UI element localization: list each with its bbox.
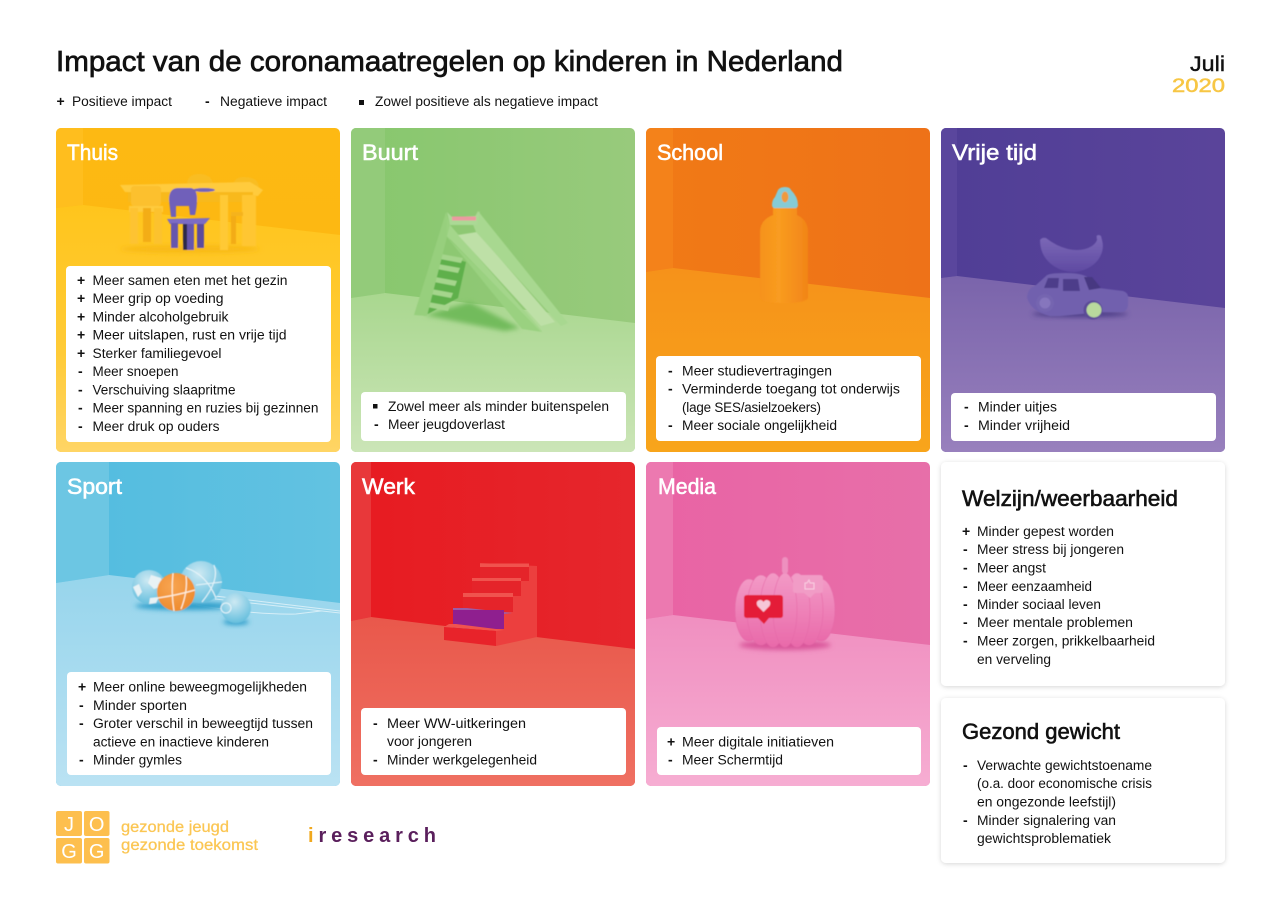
list: Gezond gewicht: (o.a. door economische crisis — [977, 776, 1152, 791]
text box: Thuis: + — [77, 345, 85, 361]
list: Welzijn: Meer stress bij jongeren — [977, 542, 1124, 557]
text box: Thuis: + — [77, 327, 85, 343]
text box: Thuis: Meer grip op voeding — [92, 291, 224, 306]
panel: Thuis — [56, 128, 340, 452]
list: Gezond gewicht: Verwachte gewichtstoename — [977, 758, 1152, 773]
panel: Sport — [56, 462, 340, 786]
heading: Thuis: Thuis — [67, 140, 118, 165]
text box: Buurt — [361, 392, 626, 441]
text box: Buurt: Zowel meer als minder buitenspelen — [388, 399, 609, 414]
text box: Vrije tijd: - — [964, 398, 969, 414]
heading: Gezond gewicht: Gezond gewicht — [962, 719, 1120, 744]
text box: Thuis: Verschuiving slaapritme — [92, 382, 236, 398]
text box: Sport: - — [79, 752, 84, 768]
text box: Buurt: - — [374, 416, 379, 432]
list: Welzijn: - — [963, 578, 968, 594]
panel: Gezond gewicht — [941, 698, 1225, 863]
text box: School: - — [668, 362, 673, 378]
text box: Thuis: Meer uitslapen, rust en vrije tijd — [92, 328, 286, 343]
text box: Media — [657, 727, 921, 775]
list: Gezond gewicht: Minder signalering van — [977, 813, 1116, 828]
icon: pumpkin with like bubbles — [735, 557, 835, 650]
title: Impact van de coronamaatregelen op kinderen in Nederland — [56, 46, 843, 78]
legend: - — [205, 93, 210, 109]
icon: table and chairs — [120, 174, 263, 253]
text box: Werk — [361, 708, 626, 775]
list: Welzijn: - — [963, 541, 968, 557]
logo: JOGG: G — [89, 841, 104, 863]
legend — [56, 93, 598, 109]
legend: Zowel positieve als negatieve impact — [375, 94, 598, 109]
text box: School — [656, 356, 921, 441]
text box: Thuis: + — [77, 308, 85, 324]
icon: toy car with banana — [1027, 235, 1128, 320]
text box: Vrije tijd: - — [964, 417, 969, 433]
text box: Thuis: Meer snoepen — [92, 364, 178, 379]
logo: JOGG: gezonde jeugd — [121, 819, 229, 836]
panel: Welzijn/weerbaarheid — [941, 462, 1225, 686]
text box: Thuis: Minder alcoholgebruik — [92, 310, 229, 324]
text box: Vrije tijd: Minder vrijheid — [978, 418, 1070, 433]
list: Welzijn: - — [963, 596, 968, 612]
list: Gezond gewicht — [963, 757, 1152, 846]
list: Welzijn: Meer mentale problemen — [977, 615, 1133, 630]
text box: Sport: + — [78, 679, 86, 695]
text box: School: - — [668, 417, 673, 433]
text box: Werk: voor jongeren — [387, 734, 472, 749]
text box: Werk: - — [373, 715, 378, 731]
text box: Thuis: + — [77, 272, 85, 288]
heading: School: School — [657, 140, 723, 165]
heading: Welzijn/weerbaarheid: Welzijn/weerbaarheid — [962, 486, 1178, 511]
heading: Vrije tijd: Vrije tijd — [952, 140, 1037, 165]
text box: Media: Meer digitale initiatieven — [682, 734, 834, 750]
text box: Sport: Minder sporten — [93, 698, 187, 713]
list: Welzijn: - — [963, 614, 968, 630]
text box: Sport: Groter verschil in beweegtijd tussen — [93, 716, 313, 731]
text box: Thuis: Meer samen eten met het gezin — [92, 273, 288, 288]
text box: Thuis — [66, 266, 331, 442]
text box: School: Meer sociale ongelijkheid — [682, 418, 837, 433]
list: Welzijn: Meer eenzaamheid — [977, 579, 1092, 594]
text box: Thuis: Meer druk op ouders — [92, 419, 220, 434]
text box: School: (lage SES/asielzoekers) — [682, 400, 821, 415]
text box: Thuis: - — [78, 382, 83, 398]
list: Welzijn — [962, 523, 1155, 667]
list: Gezond gewicht: - — [963, 812, 968, 828]
text box: School: - — [668, 381, 673, 397]
panel: School — [646, 128, 930, 452]
text box: Sport: - — [79, 715, 84, 731]
legend: + — [56, 93, 65, 109]
icon: stairs — [444, 563, 537, 646]
list: Gezond gewicht: gewichtsproblematiek — [977, 831, 1111, 846]
text box: Sport: actieve en inactieve kinderen — [93, 734, 269, 750]
text box: School: Verminderde toegang tot onderwijs — [682, 382, 900, 397]
text box: Thuis: - — [78, 363, 83, 379]
icon: slide — [414, 211, 568, 332]
text box: Thuis: Meer spanning en ruzies bij gezinnen — [92, 401, 318, 416]
logo: iresearch: iresearch — [308, 825, 436, 847]
list: Gezond gewicht: en ongezonde leefstijl) — [977, 794, 1116, 810]
list: Welzijn: Meer zorgen, prikkelbaarheid — [977, 634, 1155, 648]
panel: Media — [646, 462, 930, 786]
text box: Media: - — [668, 752, 673, 768]
text box: Media: Meer Schermtijd — [682, 753, 783, 768]
text box: Sport: - — [79, 697, 84, 713]
text box: Vrije tijd: Minder uitjes — [978, 400, 1057, 414]
list: Welzijn: Minder gepest worden — [977, 524, 1114, 539]
text box: Media: + — [667, 734, 675, 750]
logo: JOGG: J — [64, 814, 74, 836]
text box: Thuis: - — [78, 418, 83, 434]
text box: School: Meer studievertragingen — [682, 364, 832, 378]
logo: JOGG — [56, 811, 259, 864]
list: Welzijn: - — [963, 632, 968, 648]
heading: Media: Media — [658, 474, 717, 499]
list: Welzijn: - — [963, 560, 968, 576]
heading: Sport: Sport — [67, 474, 122, 499]
heading: Buurt: Buurt — [362, 140, 418, 165]
text box: Werk: - — [373, 752, 378, 768]
text box: Vrije tijd — [951, 393, 1216, 441]
text box: Buurt: Meer jeugdoverlast — [388, 417, 505, 432]
text box: Thuis: + — [77, 290, 85, 306]
text box: Thuis: Sterker familiegevoel — [92, 346, 222, 361]
list: Welzijn: Minder sociaal leven — [977, 597, 1101, 612]
text box: Werk: Minder werkgelegenheid — [387, 753, 537, 768]
panel: Vrije tijd — [941, 128, 1225, 452]
text box: Werk: Meer WW-uitkeringen — [387, 716, 526, 731]
heading: Werk: Werk — [362, 474, 416, 499]
text box: Sport: Meer online beweegmogelijkheden — [93, 680, 307, 695]
date — [1172, 53, 1225, 97]
list: Gezond gewicht: - — [963, 757, 968, 773]
panel: Werk — [351, 462, 635, 786]
legend: Positieve impact — [72, 94, 172, 109]
logo: JOGG: G — [61, 841, 77, 863]
list: Welzijn: + — [962, 523, 970, 539]
logo: JOGG: O — [89, 814, 104, 836]
date: 2020 — [1172, 76, 1225, 97]
text box: Sport: Minder gymles — [93, 753, 182, 768]
logo: JOGG: gezonde toekomst — [121, 837, 259, 854]
icon: balls — [132, 561, 251, 625]
icon: water bottle — [760, 187, 808, 303]
panel: Buurt — [351, 128, 635, 452]
list: Welzijn: en verveling — [977, 652, 1051, 667]
text box: Sport — [67, 672, 331, 775]
legend: Negatieve impact — [220, 94, 327, 109]
list: Welzijn: Meer angst — [977, 560, 1046, 576]
date: Juli — [1190, 53, 1225, 76]
text box: Thuis: - — [78, 400, 83, 416]
